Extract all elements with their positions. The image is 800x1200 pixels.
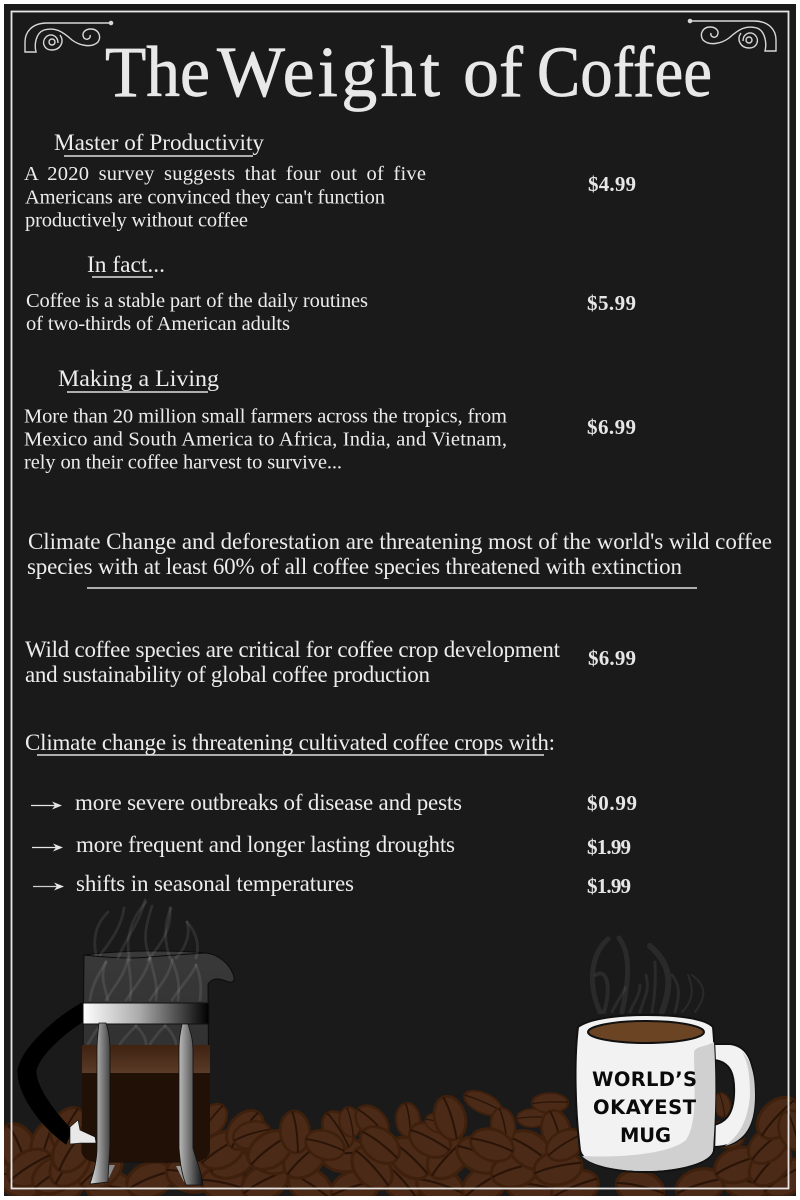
text block: survey: A 2020 survey suggests that four out of five xyxy=(24,163,426,185)
price: $1.99 xyxy=(587,835,631,859)
price: $0.99 xyxy=(587,791,637,815)
text block: farmers xyxy=(24,406,507,474)
mug label: WORLD’S xyxy=(592,1068,697,1091)
price: $6.99 xyxy=(587,415,636,439)
icon: french press xyxy=(18,900,234,1185)
steam above press xyxy=(88,900,201,1044)
text block: survey: productively without coffee xyxy=(25,210,248,232)
text block: wild coffee species: Wild coffee species are critical for coffee crop development xyxy=(25,637,561,662)
text block: daily routines: Coffee is a stable part of the daily routines xyxy=(26,290,368,312)
list item: disease and pests: more severe outbreaks of disease and pests xyxy=(75,790,462,815)
mug label: MUG xyxy=(620,1124,671,1147)
price: $1.99 xyxy=(587,874,631,898)
right leg xyxy=(176,1166,190,1182)
text block: farmers: Mexico and South America to Africa, India, and Vietnam, xyxy=(24,428,507,450)
text block: survey: Americans are convinced they can't function xyxy=(25,186,385,208)
coffee beans pile xyxy=(0,1086,800,1200)
handle clamp xyxy=(70,1120,96,1144)
list item: droughts: more frequent and longer lasting droughts xyxy=(76,832,455,857)
heading: climate change threats: Climate change is threatening cultivated coffee crops with: xyxy=(25,730,555,755)
text block: farmers: More than 20 million small farmers across the tropics, from xyxy=(24,406,507,428)
heading: Making a Living: Making a Living xyxy=(58,366,220,391)
callout: climate change and deforestation: Climate Change and deforestation are threatening most of the world's wild coffee xyxy=(28,529,772,554)
callout: climate change and deforestation xyxy=(27,529,772,588)
heading: In fact: In fact... xyxy=(87,252,165,277)
coffee crema layer xyxy=(82,1045,210,1073)
callout: climate change and deforestation: species with at least 60% of all coffee species threatened with extinction xyxy=(27,554,682,579)
metal band xyxy=(83,1003,209,1024)
title: Weight xyxy=(217,32,440,112)
coffee liquid xyxy=(82,1073,210,1162)
text block: survey xyxy=(24,163,426,232)
heading: Master of Productivity: Master of Productivity xyxy=(54,130,265,155)
text block: farmers: rely on their coffee harvest to survive... xyxy=(24,452,342,474)
icon: right corner ornament xyxy=(688,19,776,51)
text block: daily routines: of two-thirds of American adults xyxy=(26,313,290,335)
icon: mug xyxy=(576,1015,755,1172)
mug handle xyxy=(712,1044,755,1147)
mug shading xyxy=(582,1042,715,1171)
icon: mug steam xyxy=(592,938,703,1012)
title: Coffee xyxy=(537,32,712,112)
price: $5.99 xyxy=(587,291,636,315)
mug label: OKAYEST xyxy=(593,1096,697,1119)
text block: daily routines xyxy=(26,290,368,335)
title: The xyxy=(105,32,210,112)
list item: seasonal temperatures: shifts in seasonal temperatures xyxy=(76,871,354,896)
title xyxy=(105,32,712,112)
coffee in mug xyxy=(588,1021,704,1043)
text block: wild coffee species: and sustainability of global coffee production xyxy=(25,662,430,687)
handle xyxy=(18,1003,82,1144)
glass carafe xyxy=(82,951,234,1162)
title: of xyxy=(463,32,523,112)
mug body xyxy=(576,1015,715,1172)
mug label xyxy=(592,1068,697,1147)
price: $6.99 xyxy=(588,646,636,670)
icon: left corner ornament xyxy=(25,21,113,52)
left leg xyxy=(100,1165,115,1180)
price: $4.99 xyxy=(588,172,636,196)
text block: wild coffee species xyxy=(25,637,561,687)
